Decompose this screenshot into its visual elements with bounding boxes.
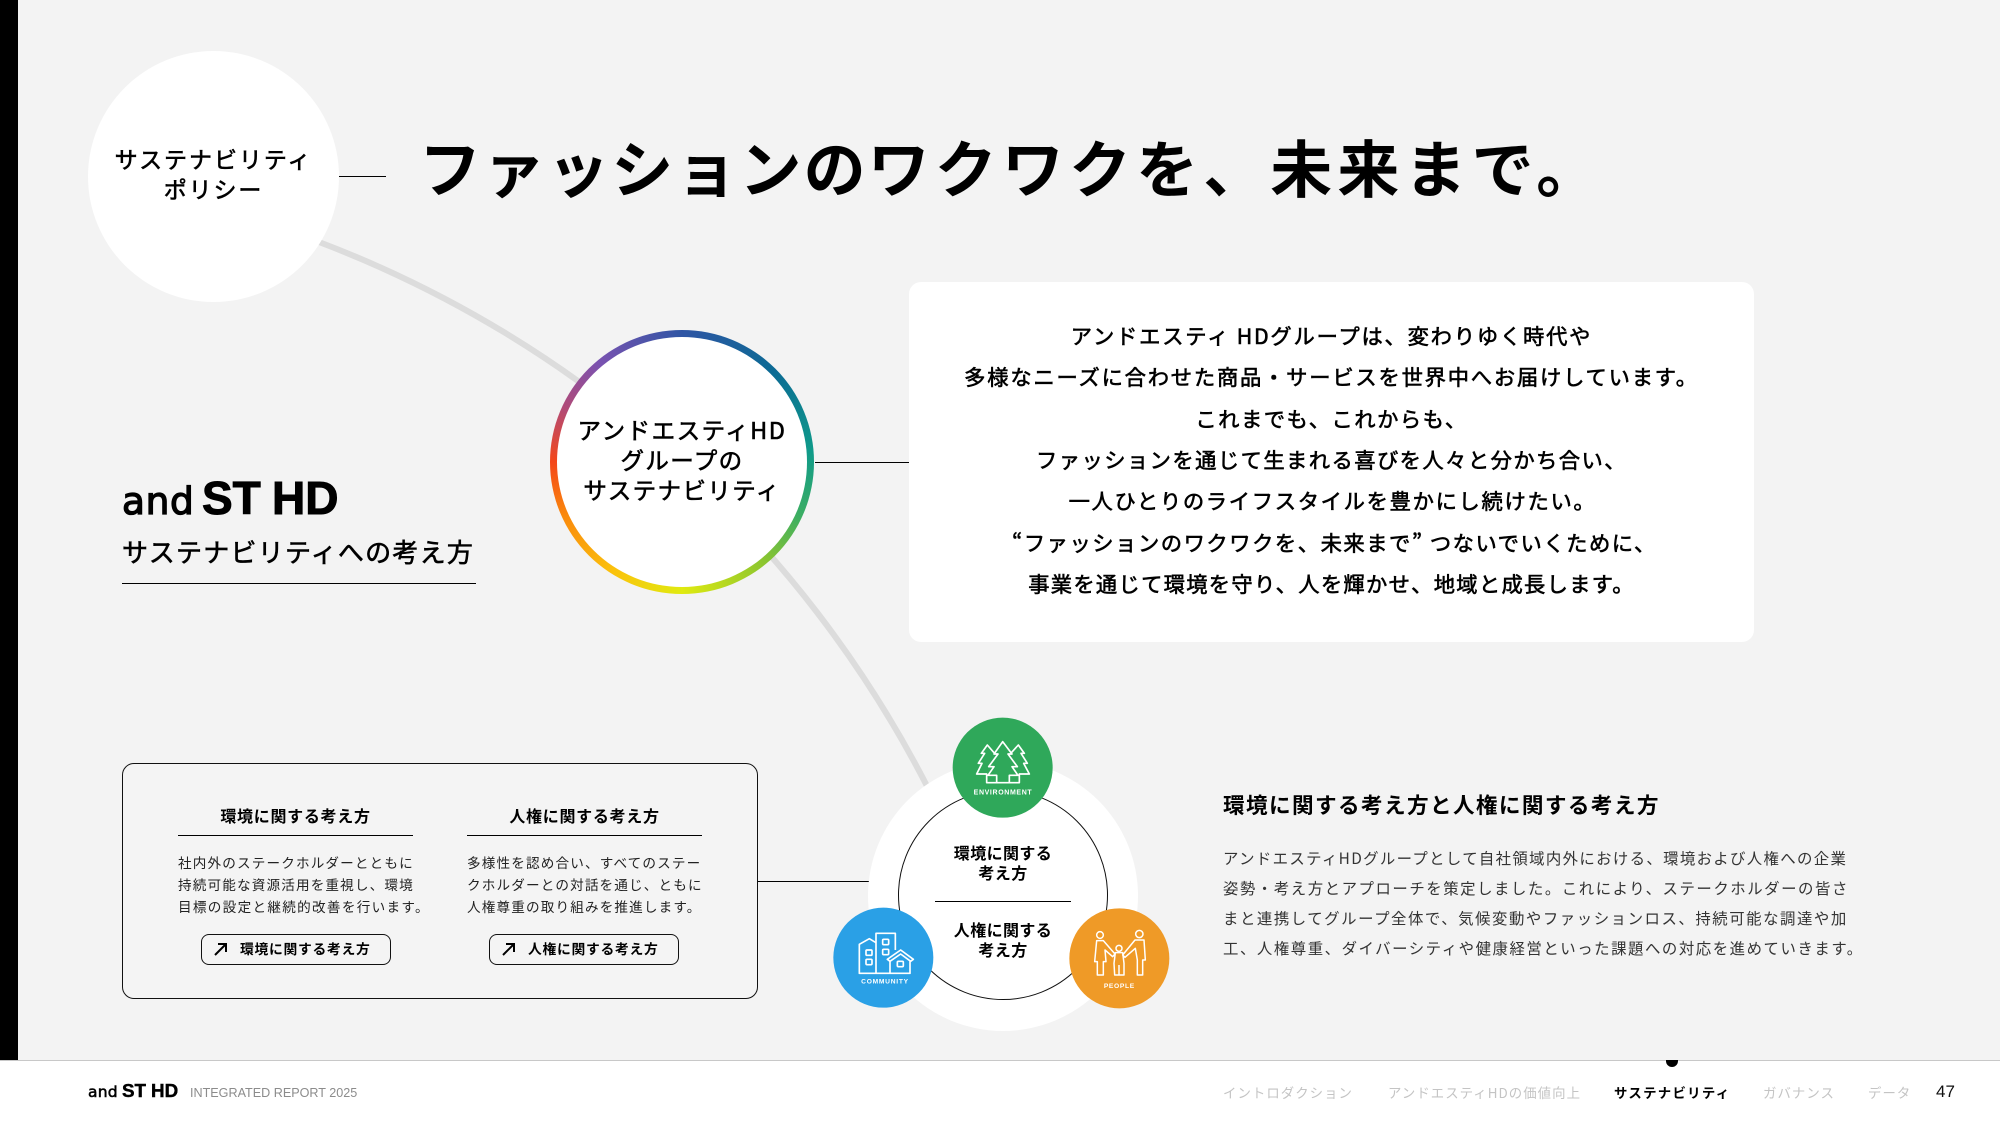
diagram label: human rights: 考え方 [978,937,1028,961]
ring text line 3: サステナビリティ [583,472,781,506]
nav item: value creation: アンドエスティHDの価値向上 [1388,1082,1581,1102]
footer logo [88,1080,178,1101]
ring text line 2: グループの [620,442,744,476]
button label: 環境に関する考え方 [240,938,370,958]
button: human rights [489,934,679,965]
button: environment [201,934,391,965]
heading: approach to sustainability: サステナビリティへの考え方 [122,533,474,570]
diagram label: environment [954,840,1052,884]
paragraph line 1: アンドエスティHDグループとして自社領域内外における、環境および人権への企業 [1223,847,1847,869]
panel: two policies [122,763,758,999]
nav item: sustainability: サステナビリティ [1614,1082,1730,1102]
page number: 47 [1936,1082,1955,1101]
paragraph line 2: 姿勢・考え方とアプローチを策定しました。これにより、ステークホルダーの皆さ [1223,877,1849,899]
diagram label: environment: 環境に関する [954,840,1052,864]
footer logo: and [88,1083,118,1101]
icon: environment badge: ENVIRONMENT [974,790,1032,797]
icon: people badge [1069,908,1170,1008]
paragraph line 3: まと連携してグループ全体で、気候変動やファッションロス、持続可能な調達や加 [1223,907,1848,929]
panel rule: human rights [467,835,702,836]
panel text: human rights line 2: クホルダーとの対話を通じ、ともに [467,874,703,894]
button label: 人権に関する考え方 [528,938,658,958]
diagram divider [935,901,1071,902]
panel heading: human rights: 人権に関する考え方 [509,803,660,827]
nav item: introduction: イントロダクション [1223,1082,1353,1102]
statement line 7: 事業を通じて環境を守り、人を輝かせ、地域と成長します。 [1028,568,1635,599]
connector line: ring to statement [815,462,910,463]
rainbow ring circle [550,330,814,594]
policy label line 1: サステナビリティ [115,141,312,175]
footer report name: INTEGRATED REPORT 2025 [190,1086,357,1100]
statement line 3: これまでも、これからも、 [1195,403,1468,434]
logo: and ST HD: ST [202,472,261,524]
connector line: policy to title [339,176,386,177]
section heading: approaches: 環境に関する考え方と人権に関する考え方 [1223,789,1660,820]
footer bar [0,1060,2000,1125]
section paragraph [1223,847,1864,959]
diagram inner circle [898,790,1108,1000]
logo: and ST HD: and [122,479,194,523]
diagram white backdrop [868,761,1138,1031]
paragraph line 4: 工、人権尊重、ダイバーシティや健康経営といった課題への対応を進めていきます。 [1223,937,1864,959]
logo: and ST HD: HD [272,472,338,524]
logo: and ST HD [122,472,338,524]
icon: environment badge [952,718,1053,818]
diagram label: human rights: 人権に関する [954,917,1052,941]
footer nav marker [1666,1060,1678,1067]
heading underline [122,583,476,584]
panel: group statement [909,282,1754,642]
statement line 6: “ファッションのワクワクを、未来まで” つないでいくために、 [1012,527,1657,558]
ring text line 1: アンドエスティHD [578,412,786,446]
ring inner white disc [557,337,807,587]
diagram label: human rights [954,917,1052,961]
panel text: environment: 社内外のステークホルダーとともに [178,852,414,872]
button icon: arrow [214,943,227,956]
panel text: environment line 3: 目標の設定と継続的改善を行います。 [178,896,430,916]
sidebar: black strip [0,0,18,1060]
icon: community badge: COMMUNITY [861,978,909,985]
title: ファッションのワクワクを、未来まで。 [419,120,1603,210]
policy circle [88,51,339,302]
statement line 2: 多様なニーズに合わせた商品・サービスを世界中へお届けしています。 [964,361,1699,392]
connector line: panel to diagram [758,881,899,882]
nav item: data: データ [1868,1082,1911,1102]
panel text: environment line 2: 持続可能な資源活用を重視し、環境 [178,874,414,894]
statement line 5: 一人ひとりのライフスタイルを豊かにし続けたい。 [1069,485,1596,516]
diagram: themes cluster [868,770,1138,1031]
icon: people badge: PEOPLE [1104,983,1135,990]
footer logo: ST [122,1080,146,1101]
footer logo: HD [151,1080,178,1101]
nav item: governance: ガバナンス [1763,1082,1835,1102]
panel text: human rights line 3: 人権尊重の取り組みを推進します。 [467,896,702,916]
panel rule: environment [178,835,413,836]
panel text: human rights: 多様性を認め合い、すべてのステー [467,852,701,872]
statement line 1: アンドエスティ HDグループは、変わりゆく時代や [1071,320,1592,351]
panel heading: environment: 環境に関する考え方 [220,803,371,827]
button icon: arrow [502,943,515,956]
statement line 4: ファッションを通じて生まれる喜びを人々と分かち合い、 [1036,444,1627,475]
icon: community badge [833,908,934,1008]
diagram label: environment: 考え方 [978,860,1028,884]
policy label line 2: ポリシー [164,171,263,205]
